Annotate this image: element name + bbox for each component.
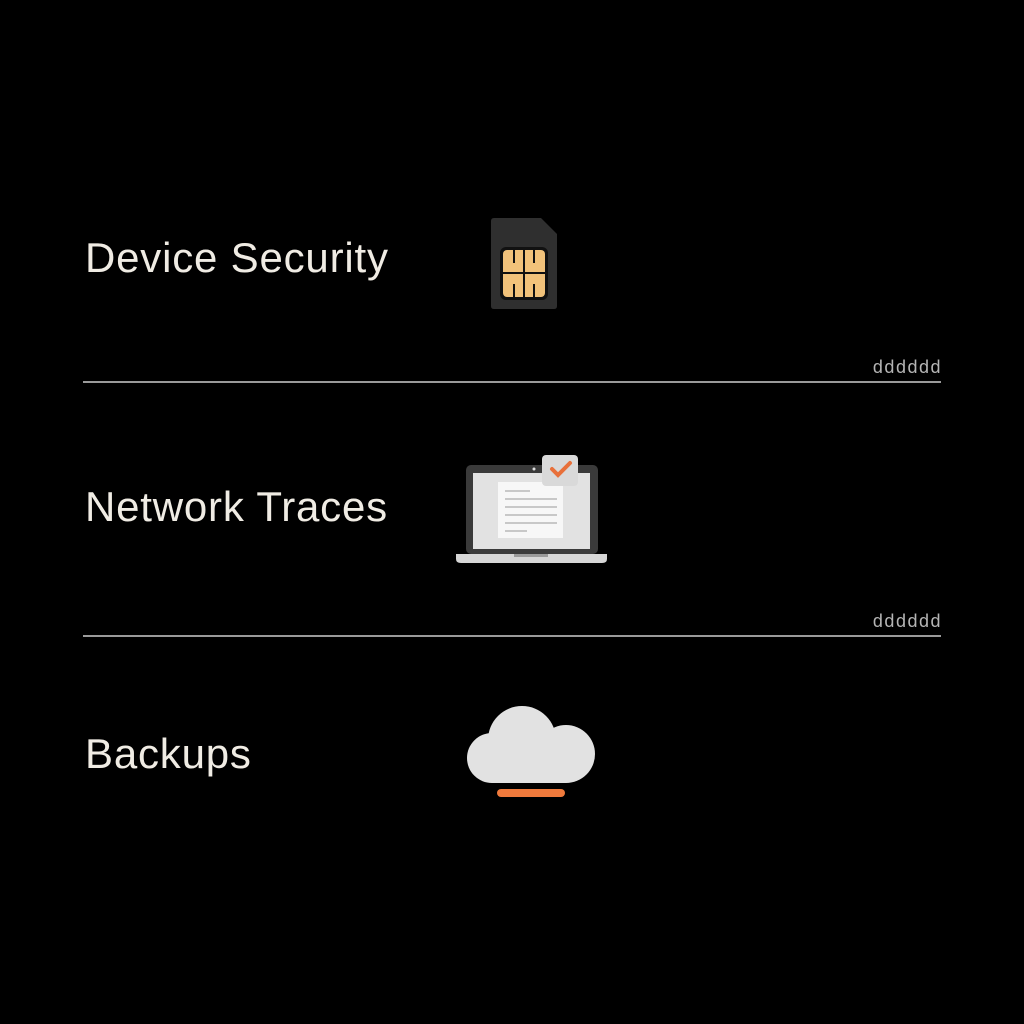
- icon: SIM card: [491, 218, 557, 309]
- heading: Device Security: Device Security: [85, 234, 389, 281]
- note: dddddd 1: dddddd: [873, 357, 942, 377]
- icon: cloud with orange bar: [467, 706, 595, 797]
- heading: Network Traces: Network Traces: [85, 483, 388, 530]
- heading: Backups: Backups: [85, 730, 252, 777]
- note: dddddd 2: dddddd: [873, 611, 942, 631]
- icon: laptop with document: [456, 455, 607, 563]
